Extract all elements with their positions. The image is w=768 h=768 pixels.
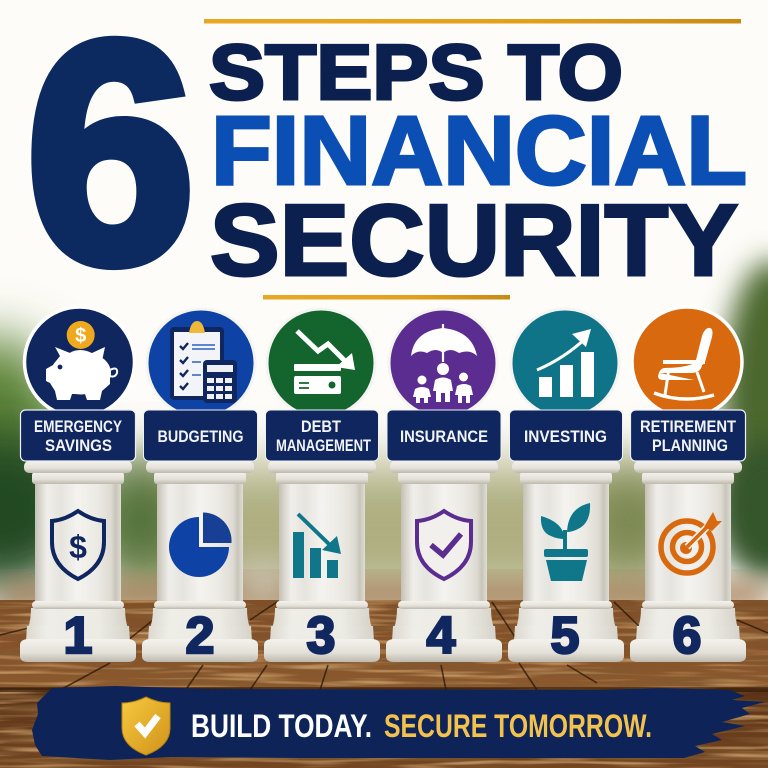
banner tagline: BUILD TODAY. [191, 708, 372, 744]
label: insurance: INSURANCE [400, 427, 488, 446]
icon: shield with dollar [52, 511, 104, 579]
icon: pie chart [169, 512, 232, 577]
icon: investing chart badge [511, 309, 619, 417]
icon: piggy bank badge: $ [75, 325, 86, 347]
icon: gold check shield [122, 697, 170, 755]
icon: potted plant [541, 503, 590, 581]
numbers on pillar bases: 5 [551, 607, 579, 665]
pillar 3 [264, 461, 380, 662]
pillar 1 [20, 461, 136, 662]
banner tagline: SECURE TOMORROW. [384, 708, 652, 744]
icon: rocking chair badge [632, 307, 742, 417]
label: debt management: MANAGEMENT [276, 436, 371, 455]
numbers on pillar bases: 1 [64, 607, 92, 665]
label: debt management: DEBT [301, 417, 342, 436]
title: FINANCIAL [211, 96, 747, 205]
banner tagline [191, 708, 652, 744]
numbers on pillar bases: 2 [186, 607, 214, 665]
label: investing: INVESTING [524, 427, 607, 446]
pillar 2 [142, 461, 258, 662]
icon: piggy bank badge [24, 307, 134, 417]
icon: shield with dollar: $ [69, 529, 87, 565]
icon: declining bars [293, 514, 341, 578]
label: emergency savings [20, 410, 136, 461]
top gold rule [204, 19, 741, 24]
icon: target with arrow [661, 512, 722, 573]
label: debt management [266, 410, 378, 461]
numbers on pillar bases: 4 [427, 607, 456, 665]
label: retirement planning [630, 410, 746, 461]
label: retirement planning: PLANNING [652, 436, 728, 455]
title [209, 28, 747, 297]
icon: umbrella and family badge [389, 309, 497, 417]
numbers on pillar bases [64, 607, 701, 665]
label: emergency savings: SAVINGS [45, 436, 112, 455]
wooden table [0, 600, 768, 768]
pillar 6 [630, 461, 746, 662]
title: STEPS TO [209, 28, 623, 116]
icon: shield with check [417, 511, 471, 579]
label: insurance [387, 410, 501, 461]
label: budgeting: BUDGETING [158, 427, 244, 446]
numbers on pillar bases: 3 [307, 607, 335, 665]
label: budgeting [144, 410, 258, 461]
label: emergency savings: EMERGENCY [34, 417, 123, 436]
title: SECURITY [210, 185, 738, 297]
icon: debt arrow and card badge [267, 309, 375, 417]
pillar 5 [508, 461, 624, 662]
icon: budget checklist badge [147, 309, 255, 417]
pillar 4 [386, 461, 502, 662]
label: retirement planning: RETIREMENT [640, 417, 737, 436]
numbers on pillar bases: 6 [673, 607, 701, 665]
bottom banner brush stroke [32, 686, 765, 760]
lower gold rule [263, 295, 510, 300]
label: investing [510, 410, 622, 461]
